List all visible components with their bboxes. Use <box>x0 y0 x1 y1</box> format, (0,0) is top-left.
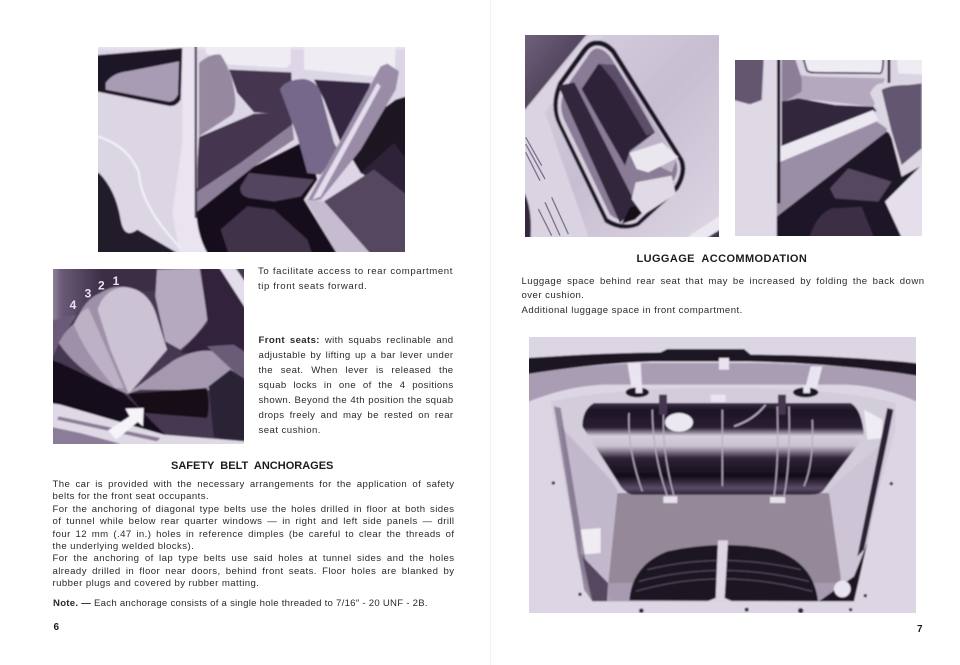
page number 6: 6 <box>54 622 59 633</box>
photo: rear seat folded, interior from door <box>98 47 405 252</box>
text: front seats description: Front seats: with squabs reclinable and <box>258 335 454 346</box>
text: safety belt anchorages body: For the anchoring of diagonal type belts use the holes drilled in floor at both sides <box>52 504 454 515</box>
text: luggage accommodation body: over cushion. <box>522 290 584 301</box>
page number 7: 7 <box>917 624 923 635</box>
text: front seats description: squab locks in one of the 4 positions <box>258 380 454 391</box>
text: tip front seats: To facilitate access to rear compartment <box>258 266 453 277</box>
seat position numbers: 3 <box>85 287 92 301</box>
text: safety belt anchorages body <box>52 479 454 589</box>
text: front seats description: shown. Beyond the 4th position the squab <box>258 395 454 406</box>
page fold <box>490 0 491 665</box>
seat position numbers: 2 <box>98 279 105 293</box>
text: safety belt anchorages body: of tunnel while below rear quarter windows — in right and left side panels — drill <box>52 516 454 527</box>
text: front seats description <box>258 335 454 436</box>
photo: rear seat folded for luggage <box>735 60 922 236</box>
text: safety belt anchorages body: The car is provided with the necessary arrangements for the application of safety <box>52 479 454 490</box>
text: safety belt anchorages body: rubber plugs and covered by rubber matting. <box>52 578 259 589</box>
text: front seats description: adjustable by lifting up a bar lever under <box>258 350 454 361</box>
text: safety belt anchorages body: For the anchoring of lap type belts use said holes at tunnel sides and the holes <box>52 553 454 564</box>
text: tip front seats: tip front seats forward. <box>258 281 367 292</box>
heading: safety belt anchorages: SAFETY BELT ANCHORAGES <box>171 460 333 472</box>
seat position numbers: 4 <box>70 298 77 312</box>
seat position numbers: 1 <box>113 274 120 288</box>
text: safety belt anchorages body: four 12 mm (.47 in.) holes in reference dimples (be careful to clear the threads of <box>52 529 454 540</box>
text: luggage accommodation body: Additional luggage space in front compartment. <box>522 305 743 316</box>
note: anchorage thread: Note. — Each anchorage consists of a single hole threaded to 7/16″ - 20 UNF - 2B. <box>53 598 428 609</box>
text: safety belt anchorages body: already drilled in floor near doors, behind front seats. Floor holes are blanked by <box>52 566 454 577</box>
text: luggage accommodation body: Luggage space behind rear seat that may be increased by folding the back down <box>522 276 924 287</box>
louvres <box>526 137 568 235</box>
text: tip front seats <box>258 266 453 292</box>
text: front seats description: the seat. When lever is released the <box>258 365 454 376</box>
text: front seats description: drops freely and may be rested on rear <box>258 410 454 421</box>
seat position numbers <box>70 274 120 312</box>
photo: front seat squab positions <box>53 269 244 444</box>
text: luggage accommodation body <box>522 276 924 316</box>
text: safety belt anchorages body: belts for the front seat occupants. <box>52 491 209 502</box>
heading: luggage accommodation: LUGGAGE ACCOMMODATION <box>636 253 807 265</box>
text: safety belt anchorages body: the underlying welded blocks). <box>52 541 194 552</box>
photo: front luggage compartment with fuel tank and spare wheel <box>529 337 916 613</box>
photo: luggage through rear window <box>525 35 719 237</box>
text: front seats description: seat cushion. <box>258 425 321 436</box>
